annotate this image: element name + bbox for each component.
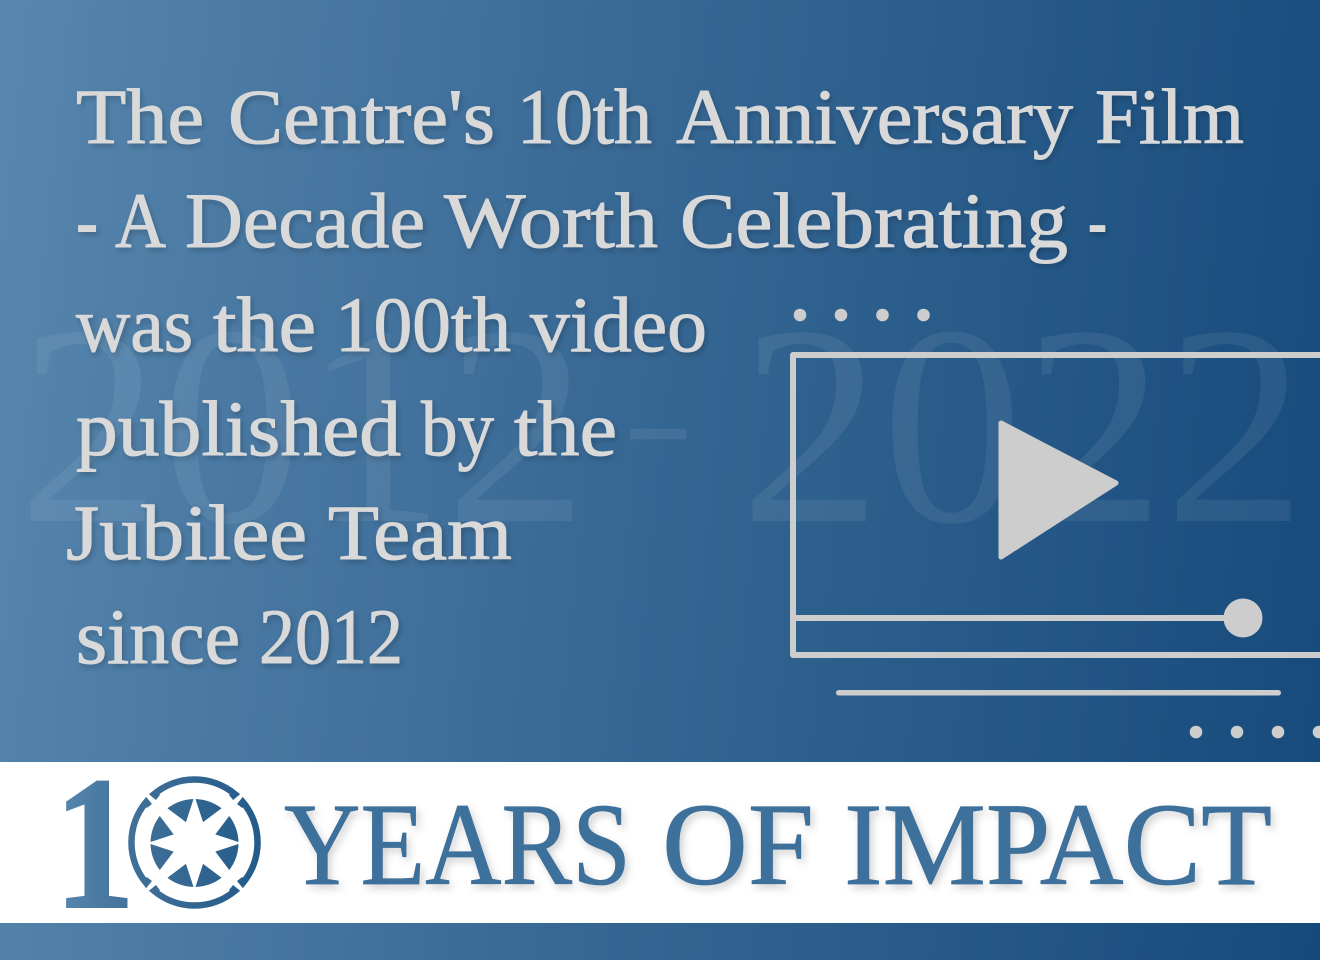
- banner title: [284, 779, 1272, 910]
- headline text: -: [1088, 177, 1107, 264]
- white banner: [0, 762, 1320, 923]
- headline text: the: [213, 281, 316, 368]
- headline text: -: [76, 177, 98, 264]
- top dots: [794, 309, 930, 321]
- headline text: published: [76, 385, 401, 472]
- bottom dots: [1190, 726, 1320, 738]
- watermark years 2012 - 2022: 2012: [18, 267, 588, 583]
- caption line: [836, 690, 1281, 696]
- headline text: 10th: [517, 73, 652, 160]
- banner title: OF: [662, 779, 814, 910]
- watermark years 2012 - 2022: 2022: [740, 267, 1306, 583]
- headline text: Anniversary: [676, 73, 1073, 160]
- icon: video player: [793, 309, 1320, 738]
- banner title: IMPACT: [844, 779, 1272, 910]
- headline text: since: [76, 593, 240, 680]
- headline text: Team: [328, 489, 512, 576]
- numeral 1: 1: [54, 739, 135, 949]
- headline text: Centre's: [228, 73, 495, 160]
- logo: 10 with emblem: [54, 739, 258, 949]
- headline text: Jubilee: [66, 489, 307, 576]
- headline text: 100th: [335, 281, 511, 368]
- watermark years 2012 - 2022: -: [622, 343, 694, 498]
- headline text: was: [76, 281, 193, 368]
- emblem compass: [131, 779, 258, 906]
- headline text: the: [514, 385, 617, 472]
- progress bar: [794, 598, 1262, 638]
- headline text: Decade: [185, 177, 425, 264]
- headline text: A: [115, 177, 166, 264]
- watermark years 2012 - 2022: [18, 267, 1306, 583]
- headline text: [66, 73, 1244, 680]
- headline text: video: [530, 281, 707, 368]
- headline text: The: [76, 73, 204, 160]
- banner title: YEARS: [284, 779, 631, 910]
- headline text: Worth: [444, 177, 658, 264]
- video frame: [793, 355, 1320, 655]
- play button: [1001, 423, 1116, 557]
- headline text: 2012: [259, 593, 403, 680]
- headline text: by: [421, 385, 494, 472]
- headline text: Film: [1095, 73, 1244, 160]
- headline text: Celebrating: [680, 177, 1068, 264]
